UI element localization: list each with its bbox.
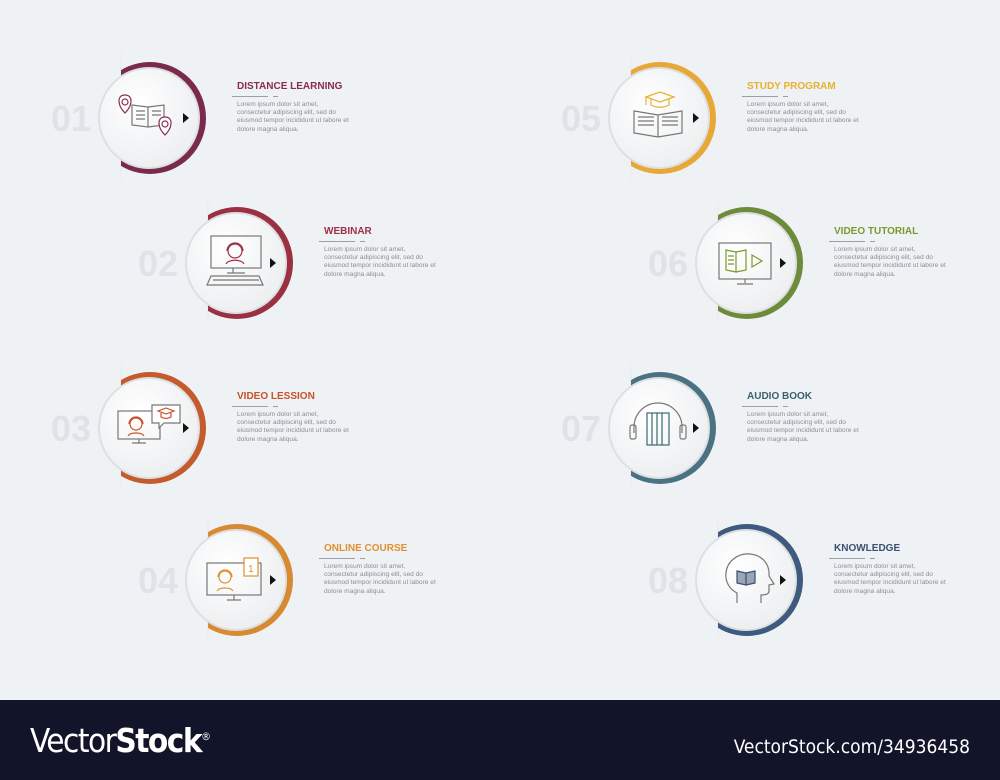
item 03: video lession (51, 372, 349, 484)
text 06: consectetur adipiscing elit, sed do (834, 254, 933, 261)
text 03: dolore magna aliqua. (237, 436, 299, 443)
text 05: consectetur adipiscing elit, sed do (747, 109, 846, 116)
title 06: VIDEO TUTORIAL (834, 226, 918, 237)
text 01: eiusmod tempor incididunt ut labore et (237, 117, 349, 124)
text 08: Lorem ipsum dolor sit amet, (834, 563, 915, 570)
text 07: dolore magna aliqua. (747, 436, 809, 443)
text 06: Lorem ipsum dolor sit amet, (834, 246, 915, 253)
icon: audio book (630, 403, 686, 445)
text 08: eiusmod tempor incididunt ut labore et (834, 579, 946, 586)
item 03: video lession: 03 (51, 408, 91, 449)
text 05: dolore magna aliqua. (747, 126, 809, 133)
text 05: eiusmod tempor incididunt ut labore et (747, 117, 859, 124)
footer bar (0, 700, 1000, 780)
item 07: audio book (561, 372, 859, 484)
text 01: dolore magna aliqua. (237, 126, 299, 133)
text 03: consectetur adipiscing elit, sed do (237, 419, 336, 426)
icon: video lesson (118, 405, 180, 443)
text 07 (747, 411, 859, 443)
item 05: study program: 05 (561, 98, 601, 139)
title 04: ONLINE COURSE (324, 543, 407, 554)
item 08: knowledge: 08 (648, 560, 688, 601)
text 07: eiusmod tempor incididunt ut labore et (747, 427, 859, 434)
title 05: STUDY PROGRAM (747, 81, 836, 92)
text 08 (834, 563, 946, 595)
title 03: VIDEO LESSION (237, 391, 315, 402)
text 01: Lorem ipsum dolor sit amet, (237, 101, 318, 108)
item 04: online course (138, 524, 436, 636)
icon: video tutorial (719, 243, 771, 284)
text 06: dolore magna aliqua. (834, 271, 896, 278)
item 02: webinar: 02 (138, 243, 178, 284)
icon: computer webinar (207, 236, 263, 285)
text 05 (747, 101, 859, 133)
text 01: consectetur adipiscing elit, sed do (237, 109, 336, 116)
item 05: study program (561, 62, 859, 174)
text 04: Lorem ipsum dolor sit amet, (324, 563, 405, 570)
title 07: AUDIO BOOK (747, 391, 812, 402)
icon: study program (634, 92, 682, 137)
text 08: consectetur adipiscing elit, sed do (834, 571, 933, 578)
text 02 (324, 246, 436, 278)
text 02: eiusmod tempor incididunt ut labore et (324, 262, 436, 269)
text 04: consectetur adipiscing elit, sed do (324, 571, 423, 578)
icon: online course (207, 558, 261, 600)
text 03 (237, 411, 349, 443)
item 01: distance learning (51, 62, 349, 174)
title 01: DISTANCE LEARNING (237, 81, 342, 92)
icon: map book (119, 95, 171, 135)
text 05: Lorem ipsum dolor sit amet, (747, 101, 828, 108)
text 02: consectetur adipiscing elit, sed do (324, 254, 423, 261)
item 02: webinar (138, 207, 436, 319)
item 06: video tutorial: 06 (648, 243, 688, 284)
title 08: KNOWLEDGE (834, 543, 900, 554)
text 01 (237, 101, 349, 133)
text 04: eiusmod tempor incididunt ut labore et (324, 579, 436, 586)
text 06: eiusmod tempor incididunt ut labore et (834, 262, 946, 269)
text 07: consectetur adipiscing elit, sed do (747, 419, 846, 426)
icon: online course: 1 (248, 564, 254, 575)
title 02: WEBINAR (324, 226, 372, 237)
text 08: dolore magna aliqua. (834, 588, 896, 595)
item 04: online course: 04 (138, 560, 178, 601)
item 07: audio book: 07 (561, 408, 601, 449)
text 06 (834, 246, 946, 278)
footer logo: VectorStock® (30, 721, 210, 760)
text 03: eiusmod tempor incididunt ut labore et (237, 427, 349, 434)
text 04: dolore magna aliqua. (324, 588, 386, 595)
text 02: Lorem ipsum dolor sit amet, (324, 246, 405, 253)
item 01: distance learning: 01 (51, 98, 91, 139)
footer url: VectorStock.com/34936458 (734, 736, 970, 758)
icon: head with book (726, 554, 774, 603)
text 07: Lorem ipsum dolor sit amet, (747, 411, 828, 418)
text 03: Lorem ipsum dolor sit amet, (237, 411, 318, 418)
text 04 (324, 563, 436, 595)
item 06: video tutorial (648, 207, 946, 319)
text 02: dolore magna aliqua. (324, 271, 386, 278)
item 08: knowledge (648, 524, 946, 636)
